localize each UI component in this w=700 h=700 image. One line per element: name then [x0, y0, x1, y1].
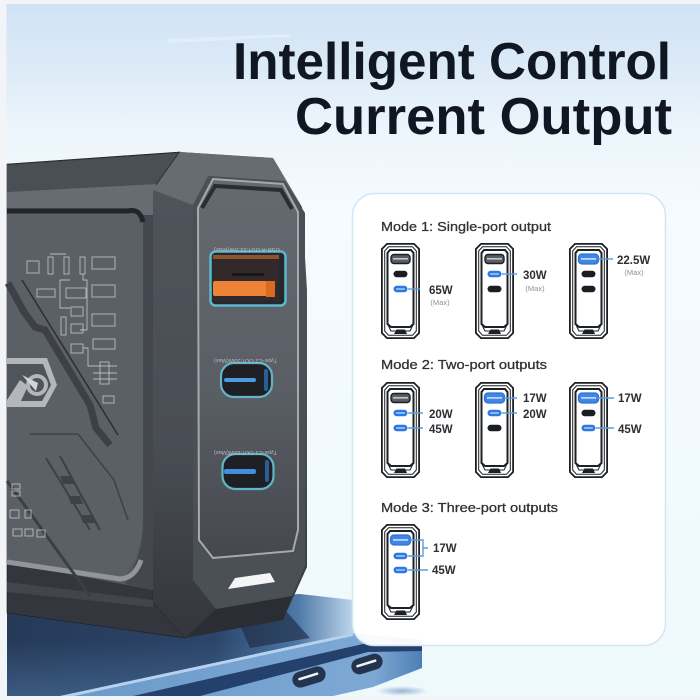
label: 20W 45W: 45W: [429, 424, 453, 436]
heading: mode 3: Mode 3: Three-port outputs: [381, 500, 559, 515]
icon: mode 3 all ports: [382, 525, 428, 619]
laptop: [7, 594, 428, 696]
title: Current Output: [295, 88, 672, 146]
circuit traces: [10, 254, 117, 537]
charger: [7, 152, 307, 638]
charger side face: [7, 152, 185, 638]
label: 65W: [429, 285, 453, 307]
highlight streak: [166, 34, 290, 43]
port: USB-A: [210, 246, 286, 306]
logo hexagon: [7, 358, 57, 407]
label: 30W: 30W: [523, 270, 547, 282]
heading: mode 1: Mode 1: Single-port output: [381, 219, 551, 234]
icon: mode 2 C2 and C1: [382, 383, 423, 477]
label: 65W: (Max): [430, 298, 450, 307]
port: Type-C2: [214, 357, 277, 397]
title: [233, 33, 672, 146]
charger underside: [185, 596, 292, 638]
charger corner face: [153, 152, 307, 638]
port: Type-C1: [214, 449, 277, 489]
port label: Type-C2 OUT:30W(Max): [214, 357, 277, 363]
icon: mode 2 A and C1: [570, 383, 614, 477]
port label: USB-A OUT:22.5W(Max): [214, 246, 280, 252]
front face rim: [198, 179, 298, 558]
icon: mode 2 A and C2: [476, 383, 517, 477]
icon: mode 1 USB-C1 65W: [382, 244, 420, 338]
label: 17W 20W: 20W: [523, 409, 547, 421]
front face: [193, 176, 305, 609]
label: 17W 45W: [432, 543, 457, 577]
panel: output modes: [352, 194, 666, 646]
label: 17W 20W: 17W: [523, 393, 547, 405]
label: 17W 45W: 17W: [618, 393, 642, 405]
label: 22.5W: 22.5W: [617, 255, 650, 267]
label: 17W 45W: [618, 393, 642, 436]
label: 20W 45W: [429, 409, 453, 436]
label: 22.5W: (Max): [624, 268, 644, 277]
white slot: [228, 573, 275, 589]
label: 30W: (Max): [525, 284, 545, 293]
icon: mode 1 USB-C2 30W: [476, 244, 517, 338]
label: 17W 20W: [523, 393, 547, 421]
label: 65W: 65W: [429, 285, 453, 297]
heading: mode 2: Mode 2: Two-port outputs: [381, 357, 548, 372]
label: 22.5W: [617, 255, 650, 277]
front face inner shadow: [202, 186, 292, 209]
title: Intelligent Control: [233, 33, 671, 91]
label: 30W: [523, 270, 547, 293]
port: laptop usb-c 1: [290, 664, 328, 690]
label: 20W 45W: 20W: [429, 409, 453, 421]
top chamfer: [153, 152, 302, 207]
label: 17W 45W: 45W: [432, 565, 456, 577]
label: 17W 45W: 45W: [618, 424, 642, 436]
port label: Type-C1 OUT:65W(Max): [214, 449, 277, 455]
icon: mode 1 USB-A 22.5W: [570, 244, 613, 338]
label: 17W 45W: 17W: [433, 543, 457, 555]
port: laptop usb-c 2: [349, 652, 385, 676]
